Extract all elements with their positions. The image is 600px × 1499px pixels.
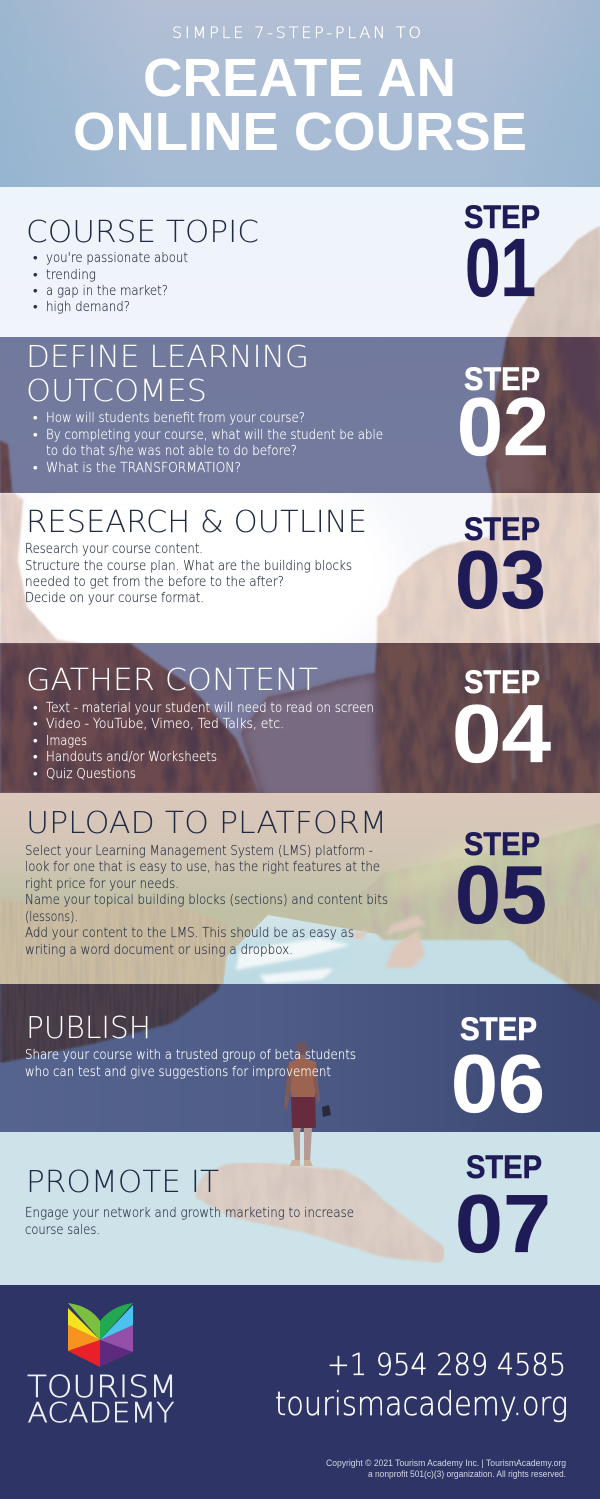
- step badge: STEP: [464, 826, 540, 862]
- step badge: 06: [451, 1037, 545, 1130]
- heading: UPLOAD TO PLATFORM: [26, 806, 387, 841]
- bullet list: •: [33, 767, 38, 782]
- kicker text: SIMPLE 7-STEP-PLAN TO: [172, 23, 421, 42]
- river in step 6: [0, 984, 600, 1132]
- lit orange face low in step 2: [492, 430, 535, 493]
- main title: CREATE AN: [143, 48, 456, 108]
- upper wall, lit part: [509, 226, 600, 337]
- bullet list: trending: [46, 268, 96, 283]
- header band: [0, 0, 600, 187]
- step badge: STEP: [460, 1011, 537, 1047]
- bullet list: What is the TRANSFORMATION?: [46, 461, 241, 476]
- heading: COURSE TOPIC: [26, 215, 259, 250]
- step badge: 05: [455, 848, 547, 941]
- paragraph: Engage your network and growth marketing to increase: [25, 1206, 354, 1221]
- panel: step 1 course topic: [0, 187, 600, 337]
- step badge: 03: [455, 533, 546, 626]
- logo wordmark: [27, 1370, 177, 1429]
- panel: step 3 research and outline: [0, 493, 600, 643]
- paragraph: Name your topical building blocks (sections) and content bits: [25, 893, 388, 908]
- paragraph: (lessons).: [25, 910, 78, 925]
- main title: ONLINE COURSE: [73, 102, 527, 162]
- bullet list: Video - YouTube, Vimeo, Ted Talks, etc.: [46, 717, 284, 732]
- bullet list: •: [33, 300, 38, 315]
- paragraph: Share your course with a trusted group of beta students: [25, 1048, 356, 1063]
- hiker standing on rock: [284, 1042, 331, 1166]
- heading: GATHER CONTENT: [26, 663, 318, 698]
- step badge: 07: [455, 1177, 551, 1270]
- right canyon wall: [241, 226, 600, 800]
- paragraph: Decide on your course format.: [25, 591, 204, 606]
- step badge: STEP: [464, 664, 540, 700]
- river island rock: [195, 1163, 444, 1263]
- logo wordmark: ACADEMY: [28, 1396, 174, 1429]
- bullet list: to do that s/he was not able to do before?: [46, 444, 297, 459]
- paragraph: Add your content to the LMS. This should be as easy as: [25, 926, 354, 941]
- bullet list: •: [33, 428, 38, 443]
- step badge: 01: [465, 221, 536, 314]
- paragraph: [25, 844, 388, 958]
- step badge: 04: [452, 687, 551, 780]
- paragraph: Research your course content.: [25, 542, 203, 557]
- bullet list: •: [33, 717, 38, 732]
- panel: step 6 publish: [0, 984, 600, 1132]
- mist in the canyon: [241, 673, 378, 800]
- warm wall colour in the darker bands: [0, 337, 600, 800]
- paragraph: needed to get from the before to the after?: [25, 575, 284, 590]
- bullet list: [33, 411, 383, 476]
- step badge: STEP: [464, 511, 540, 547]
- main title: [73, 48, 527, 162]
- bullet list: •: [33, 734, 38, 749]
- background photo: canyon, river and hiker: [0, 187, 600, 1287]
- bullet list: •: [33, 701, 38, 716]
- dark rock face: [524, 337, 600, 440]
- bullet list: •: [33, 251, 38, 266]
- bright haze in step 3: [20, 493, 378, 643]
- bullet list: How will students benefit from your course?: [46, 411, 305, 426]
- copyright notice: Copyright © 2021 Tourism Academy Inc. | TourismAcademy.org: [326, 1458, 566, 1468]
- step badge: STEP: [466, 1149, 542, 1185]
- paragraph: right price for your needs.: [25, 877, 179, 892]
- bullet list: •: [33, 750, 38, 765]
- right grass bank: [523, 907, 599, 984]
- heading: OUTCOMES: [26, 374, 207, 409]
- step badge: 02: [457, 380, 549, 473]
- bullet list: Handouts and/or Worksheets: [46, 750, 217, 765]
- copyright notice: [326, 1458, 566, 1479]
- bullet list: •: [33, 461, 38, 476]
- step badge: STEP: [464, 199, 540, 235]
- bullet list: high demand?: [46, 300, 130, 315]
- heading: DEFINE LEARNING: [26, 340, 309, 375]
- paragraph: who can test and give suggestions for improvement: [25, 1065, 331, 1080]
- bullet list: a gap in the market?: [46, 284, 168, 299]
- river upstream: [224, 915, 526, 984]
- bullet list: you're passionate about: [46, 251, 188, 266]
- river in step 7: [0, 1132, 600, 1287]
- copyright notice: a nonprofit 501(c)(3) organization. All rights reserved.: [368, 1469, 566, 1479]
- contact: phone and website: +1 954 289 4585: [327, 1348, 566, 1383]
- heading: PROMOTE IT: [26, 1165, 219, 1200]
- bullet list: By completing your course, what will the student be able: [46, 428, 383, 443]
- bullet list: •: [33, 268, 38, 283]
- panel: step 4 gather content: [0, 643, 600, 793]
- left canyon wall in step 3: [0, 493, 86, 643]
- tint bands for steps 6 and 7: [0, 984, 600, 1285]
- bullet list: •: [33, 411, 38, 426]
- paragraph: Structure the course plan. What are the building blocks: [25, 559, 352, 574]
- river at right of trees: [322, 940, 524, 980]
- paragraph: [25, 1048, 356, 1080]
- heading: [26, 340, 309, 409]
- logo wordmark: TOURISM: [27, 1370, 177, 1405]
- step badge: STEP: [464, 361, 540, 397]
- paragraph: course sales.: [25, 1223, 100, 1238]
- panel: step 7 promote it: [0, 1132, 600, 1285]
- contact: phone and website: [275, 1348, 568, 1423]
- paragraph: [25, 1206, 354, 1238]
- paragraph: Select your Learning Management System (LMS) platform -: [25, 844, 373, 859]
- panel: step 5 upload to platform: [0, 793, 600, 984]
- footer band: [0, 1285, 600, 1499]
- bullet list: Images: [46, 734, 87, 749]
- bullet list: [33, 251, 188, 315]
- pale streaks on wall: [488, 470, 548, 780]
- foam: [236, 938, 350, 984]
- icon: rainbow book logo: [68, 1303, 133, 1367]
- boulders: [345, 915, 425, 968]
- trees right bank: [374, 823, 600, 951]
- valley floor in step 5: [0, 793, 600, 1003]
- heading: PUBLISH: [26, 1011, 151, 1046]
- heading: RESEARCH & OUTLINE: [26, 505, 367, 540]
- right grass in step 6: [564, 984, 600, 1004]
- bullet list: Quiz Questions: [46, 767, 136, 782]
- bullet list: Text - material your student will need to read on screen: [46, 701, 374, 716]
- left grass in step 6: [0, 984, 222, 1063]
- bullet list: •: [33, 284, 38, 299]
- left grass bank: [0, 900, 228, 984]
- step badge: [464, 199, 540, 314]
- bullet list: [33, 701, 374, 782]
- paragraph: [25, 542, 352, 606]
- paragraph: writing a word document or using a dropbox.: [25, 943, 293, 958]
- paragraph: look for one that is easy to use, has the right features at the: [25, 860, 380, 875]
- panel: step 2 define learning outcomes: [0, 337, 600, 493]
